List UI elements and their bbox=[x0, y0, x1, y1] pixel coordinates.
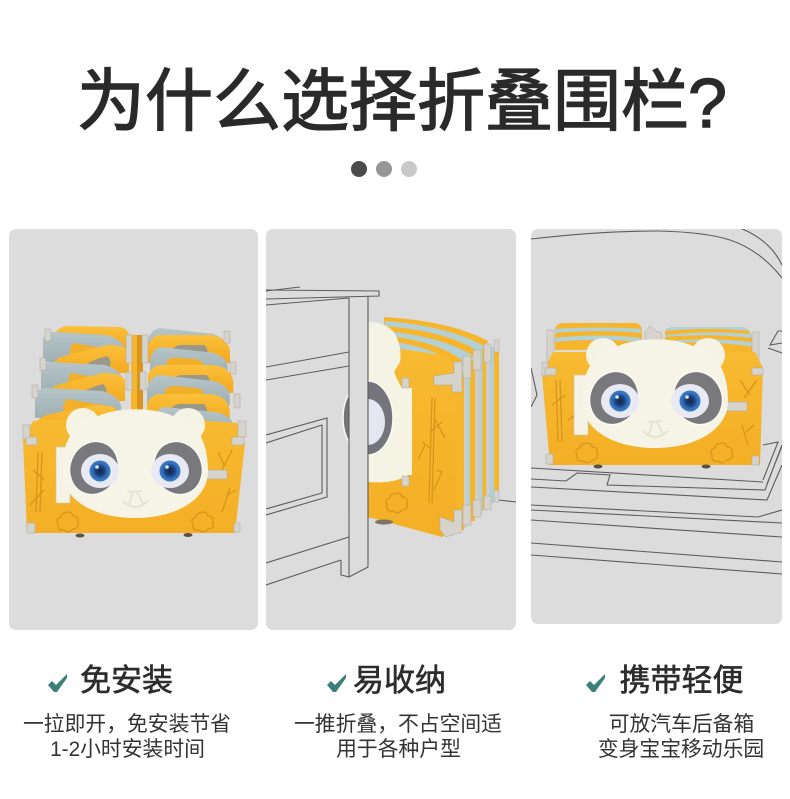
bamboo and flower relief bbox=[30, 450, 236, 532]
heading: 携带轻便 bbox=[620, 663, 744, 698]
hinges and feet bbox=[23, 421, 246, 538]
hinges, slider and feet bbox=[542, 362, 763, 468]
panel: no installation bbox=[9, 229, 258, 630]
hinge caps bbox=[434, 340, 499, 537]
floor line bbox=[498, 500, 516, 502]
description: 可放汽车后备箱 bbox=[609, 713, 754, 736]
icon: check bbox=[586, 674, 605, 692]
panda face bbox=[582, 338, 730, 448]
front yellow panel bbox=[542, 352, 763, 465]
line drawing: cabinet bbox=[266, 287, 379, 585]
feature: portable bbox=[586, 663, 764, 761]
feature: easy storage bbox=[294, 663, 502, 761]
panda face bbox=[62, 408, 210, 518]
feature: no installation bbox=[23, 663, 231, 761]
heading: 免安装 bbox=[80, 663, 173, 698]
pagination dots bbox=[351, 161, 417, 177]
branch relief bbox=[386, 398, 445, 513]
feature: easy storage: 用于各种户型 bbox=[336, 738, 461, 761]
line drawing: car trunk bbox=[531, 228, 782, 574]
heading: 易收纳 bbox=[353, 663, 446, 698]
icon: check bbox=[327, 674, 346, 692]
description: 一推折叠，不占空间适 bbox=[294, 713, 502, 736]
panel: portable bbox=[531, 228, 782, 624]
folded panels stacked behind bbox=[32, 326, 240, 434]
folded panels on top bbox=[547, 323, 759, 366]
front yellow panel bbox=[23, 418, 245, 533]
feature: portable: 变身宝宝移动乐园 bbox=[598, 738, 764, 761]
panel: easy storage bbox=[266, 229, 516, 630]
title: 为什么选择折叠围栏 bbox=[77, 64, 689, 140]
feature: no installation: 1-2小时安装时间 bbox=[50, 738, 205, 761]
bamboo and flower relief bbox=[552, 380, 757, 463]
description: 一拉即开，免安装节省 bbox=[23, 713, 231, 736]
title: ? bbox=[688, 64, 727, 142]
folded panda fence side view bbox=[343, 317, 499, 537]
icon: check bbox=[48, 674, 67, 692]
